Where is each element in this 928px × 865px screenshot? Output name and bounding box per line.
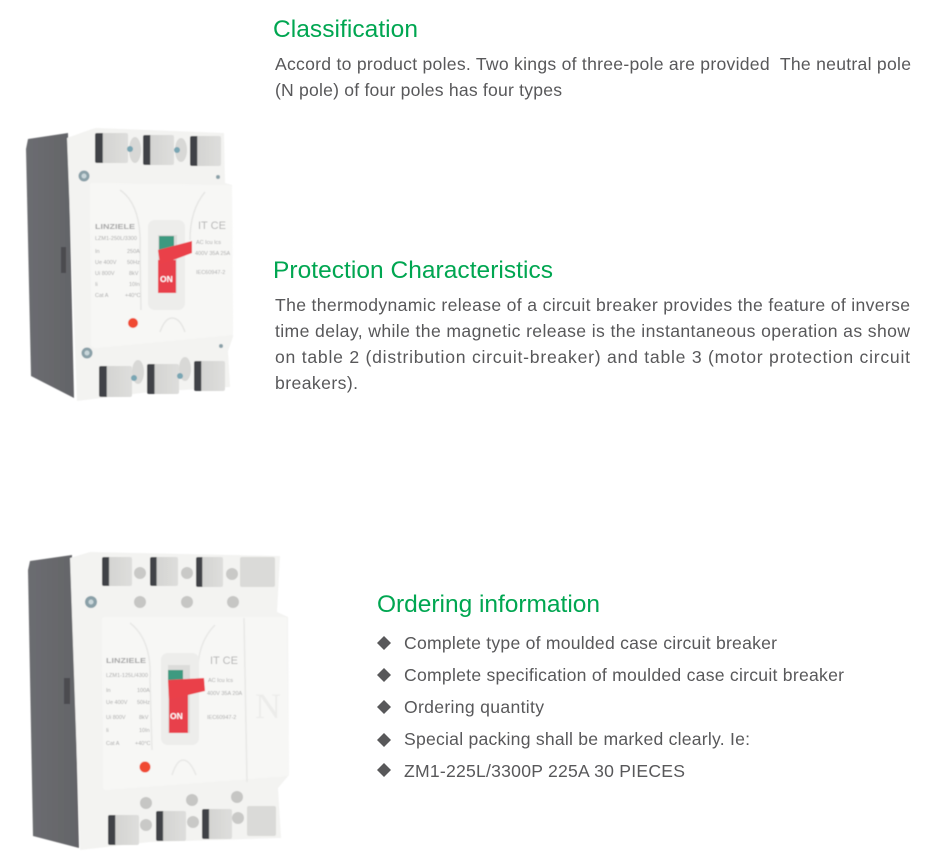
side housing clip — [64, 678, 70, 704]
breaker front face — [90, 183, 233, 348]
nameplate text: 10In — [129, 282, 140, 288]
nameplate text: LINZIELE — [106, 658, 146, 665]
nameplate text: Ii — [95, 282, 98, 288]
nameplate text: LZM1-250L/3300 — [95, 236, 137, 242]
nameplate text: 400V 35A 25A — [195, 251, 231, 257]
text block: protection description: on table 2 (distribution circuit-breaker) and table 3 (motor protection circuit — [275, 347, 910, 367]
breaker front face — [102, 617, 289, 790]
nameplate text: 8kV — [129, 271, 139, 277]
breaker white body — [70, 552, 289, 850]
switch window — [148, 220, 185, 310]
item: order example: ZM1-225L/3300P 225A 30 PIECES — [404, 761, 685, 781]
breaker side housing — [26, 133, 74, 398]
nameplate text: In — [106, 688, 111, 694]
neutral pole mark: N — [255, 686, 281, 726]
nameplate text: IEC60947-2 — [196, 270, 225, 276]
item: complete specification: Complete specification of moulded case circuit breaker — [404, 665, 844, 685]
switch window — [161, 653, 199, 745]
breaker side housing — [28, 555, 79, 848]
nameplate text: 10In — [139, 728, 150, 734]
text block: protection description: time delay, while the magnetic release is the instantaneous operation as show — [275, 321, 910, 341]
red on panel — [169, 692, 188, 733]
nameplate text: +40°C — [125, 293, 141, 299]
nameplate text: 50Hz — [137, 700, 150, 706]
top terminals — [95, 133, 221, 166]
breaker white body — [67, 128, 233, 401]
nameplate text: AC Icu Ics — [208, 678, 233, 684]
item: ordering quantity: Ordering quantity — [404, 697, 544, 717]
text block: classification description — [275, 54, 911, 100]
round red button — [128, 318, 138, 328]
nameplate text: Ui 800V — [95, 271, 115, 277]
text block: protection description — [275, 295, 910, 393]
nameplate text — [106, 655, 243, 747]
list: ordering items — [377, 633, 844, 781]
item: special packing: Special packing shall be marked clearly. Ie: — [404, 729, 750, 749]
mounting screws — [78, 170, 223, 358]
nameplate text: AC Icu Ics — [196, 240, 221, 246]
nameplate text: IT CE — [198, 220, 226, 232]
nameplate text — [95, 220, 231, 299]
nameplate text: Cat A — [106, 741, 120, 747]
bottom terminals — [99, 357, 225, 397]
bottom terminals — [108, 791, 276, 845]
red toggle handle — [158, 241, 192, 264]
switch slot — [168, 665, 190, 733]
red on panel — [158, 260, 176, 293]
nameplate text: IT CE — [210, 655, 238, 667]
nameplate text: 250A — [127, 249, 140, 255]
face contour lines — [120, 190, 205, 332]
switch slot — [158, 235, 177, 293]
text block: classification description: (N pole) of four poles has four types — [275, 80, 562, 100]
nameplate text: 50Hz — [127, 260, 140, 266]
nameplate text: 8kV — [139, 715, 149, 721]
top terminals — [102, 557, 275, 608]
text block: classification description: Accord to product poles. Two kings of three-pole are provided The neutral pole — [275, 54, 911, 74]
handle text: ON — [170, 711, 183, 721]
text block: protection description: The thermodynamic release of a circuit breaker provides the feature of inverse — [275, 295, 910, 315]
nameplate text: Ui 800V — [106, 715, 126, 721]
item: complete type: Complete type of moulded case circuit breaker — [404, 633, 777, 653]
round red button — [140, 762, 150, 772]
red toggle handle — [168, 678, 205, 699]
nameplate text: IEC60947-2 — [207, 715, 236, 721]
handle text: ON — [160, 274, 173, 284]
heading: Protection Characteristics: Protection Characteristics — [273, 257, 553, 284]
nameplate text: In — [95, 249, 100, 255]
nameplate text: Cat A — [95, 293, 109, 299]
nameplate text: LINZIELE — [95, 224, 135, 231]
nameplate text: Ii — [106, 728, 109, 734]
nameplate text: 400V 35A 20A — [207, 691, 243, 697]
heading: Classification: Classification — [273, 16, 418, 43]
heading: Ordering information: Ordering information — [377, 591, 600, 618]
side housing clip — [61, 247, 66, 273]
nameplate text: Ue 400V — [95, 260, 117, 266]
mounting screw — [85, 596, 97, 608]
face contour lines — [130, 618, 247, 782]
icon: three-pole circuit breaker photo — [26, 128, 233, 401]
nameplate text: Ue 400V — [106, 700, 128, 706]
nameplate text: LZM1-125L/4300 — [106, 673, 148, 679]
text block: protection description: breakers). — [275, 373, 358, 393]
nameplate text: 100A — [137, 688, 150, 694]
icon: four-pole circuit breaker photo — [28, 552, 289, 850]
nameplate text: +40°C — [135, 741, 151, 747]
